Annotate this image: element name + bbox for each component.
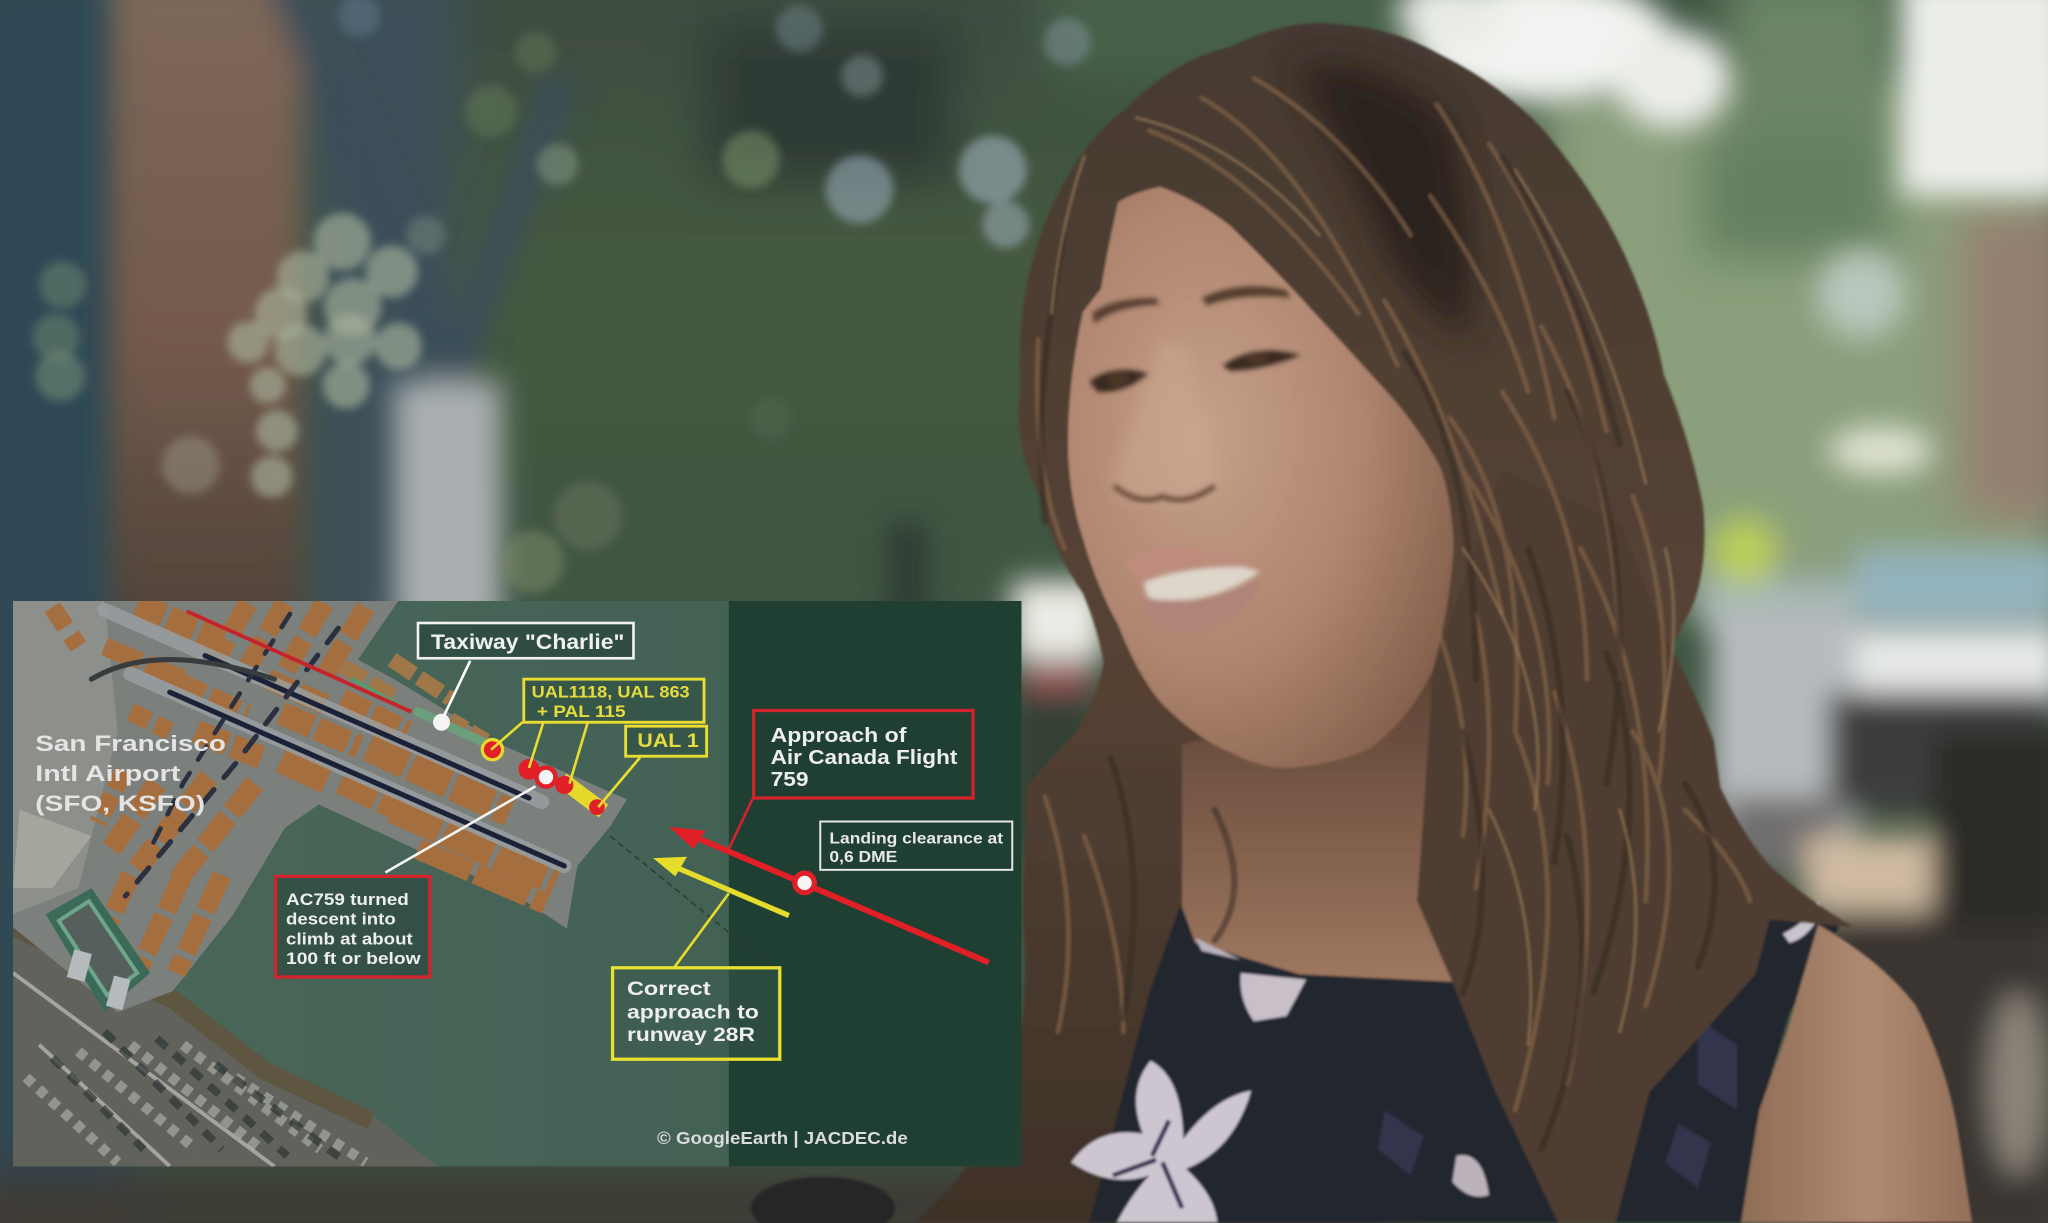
landing clearance callout xyxy=(820,822,1012,870)
orange infield strips xyxy=(52,603,555,973)
AC759 go-around callout: AC759 turned xyxy=(286,891,409,909)
map inset xyxy=(13,601,1021,1166)
Air Canada approach callout: 759 xyxy=(771,769,808,791)
map airport grounds xyxy=(13,601,627,1012)
airport name label: (SFO, KSFO) xyxy=(35,791,205,816)
correct approach callout: Correct xyxy=(627,978,711,1000)
bare arm xyxy=(1741,925,1972,1222)
correct approach callout: approach to xyxy=(627,1002,759,1024)
nose xyxy=(1113,340,1221,502)
face xyxy=(1068,187,1454,768)
map credit: © GoogleEarth | JACDEC.de xyxy=(657,1128,908,1148)
yellow correct approach arrow xyxy=(653,857,789,968)
correct approach callout xyxy=(613,968,780,1059)
UAL1118 callout: UAL1118, UAL 863 xyxy=(532,682,690,701)
UAL1118 callout xyxy=(491,679,704,784)
AC759 go-around callout: 100 ft or below xyxy=(286,950,421,968)
bokeh highlights xyxy=(33,0,1091,593)
runways xyxy=(91,610,564,896)
map city district xyxy=(13,901,438,1166)
terminal loops xyxy=(46,888,150,1012)
aircraft on taxiway markers xyxy=(481,738,605,815)
airport name label: Intl Airport xyxy=(35,761,181,786)
red highlighted taxiway line xyxy=(187,611,411,712)
red actual approach arrow xyxy=(669,827,989,963)
AC759 go-around callout: descent into xyxy=(286,911,396,929)
airport name label: San Francisco xyxy=(35,731,226,756)
microphone xyxy=(751,1177,895,1223)
AC759 go-around callout: climb at about xyxy=(286,930,413,948)
hair back mass xyxy=(914,23,1853,1222)
correct approach callout: runway 28R xyxy=(627,1024,755,1046)
UAL1118 callout: + PAL 115 xyxy=(537,702,626,721)
eyes and brows xyxy=(1089,286,1301,392)
landing clearance callout: 0,6 DME xyxy=(829,849,897,866)
AC759 go-around callout xyxy=(276,786,536,977)
UAL 1 callout: UAL 1 xyxy=(637,730,699,752)
Air Canada approach callout: Air Canada Flight xyxy=(771,747,958,769)
taxiway Charlie callout xyxy=(418,623,633,731)
mouth xyxy=(1125,547,1264,634)
Air Canada approach callout xyxy=(729,710,973,849)
neck xyxy=(1182,679,1463,993)
dress flowers xyxy=(1071,901,1822,1222)
dress xyxy=(1089,888,1839,1222)
woman portrait xyxy=(751,23,1972,1223)
taxiway Charlie callout: Taxiway "Charlie" xyxy=(431,629,624,654)
UAL 1 callout xyxy=(598,726,707,807)
hair strands xyxy=(1037,63,1750,1149)
map water and dark panel xyxy=(174,601,1022,1166)
runway extended approach track xyxy=(610,836,771,966)
Air Canada approach callout: Approach of xyxy=(771,725,907,747)
airport name label xyxy=(35,731,226,816)
landing clearance callout: Landing clearance at xyxy=(829,831,1003,848)
hair front mass over dress xyxy=(1417,470,1853,1222)
